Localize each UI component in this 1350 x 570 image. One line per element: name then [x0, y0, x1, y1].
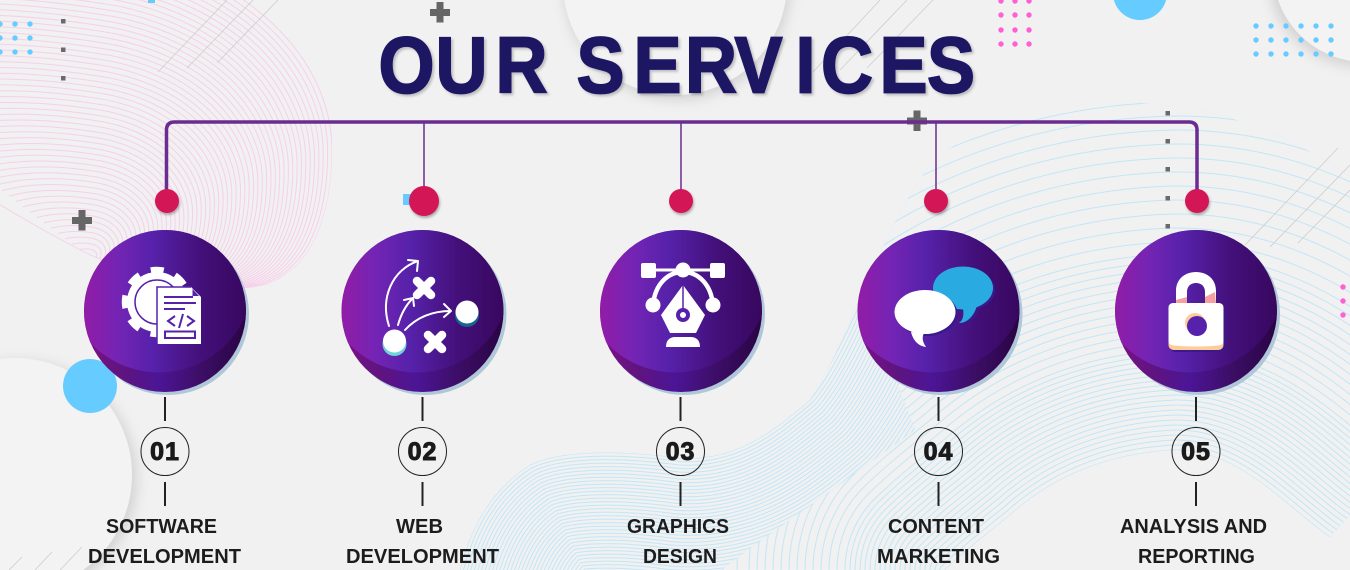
- label: web development: WEB: [396, 516, 443, 538]
- soft circle top centre: [563, 0, 789, 99]
- service 4: content marketing: [838, 184, 1027, 568]
- connector ticks 5: [1195, 397, 1197, 506]
- service 2: web development: [322, 184, 511, 568]
- blue dot grid right: [1253, 23, 1334, 57]
- connector ticks 4: [938, 397, 940, 506]
- grey squares: [61, 19, 1170, 228]
- label: analysis and reporting: ANALYSIS AND: [1120, 516, 1267, 538]
- icon: pen tool: [641, 262, 725, 347]
- label: graphics design: DESIGN: [643, 546, 717, 568]
- connector lines: [166, 122, 1197, 192]
- connector ticks 3: [680, 397, 682, 506]
- label: graphics design: GRAPHICS: [627, 516, 729, 538]
- grey plus signs: [72, 2, 927, 230]
- label: software development: DEVELOPMENT: [88, 546, 241, 568]
- number 04: 04: [924, 438, 953, 466]
- label: graphics design: [627, 516, 729, 568]
- icon: gear and code document: [126, 271, 201, 344]
- service 3: graphics design: [581, 184, 769, 568]
- label: web development: DEVELOPMENT: [346, 546, 499, 568]
- icon: speech bubbles: [894, 266, 995, 347]
- soft circle top right: [1269, 0, 1350, 66]
- label: software development: SOFTWARE: [106, 516, 217, 538]
- pink dots right: [1340, 284, 1346, 318]
- number 02: 02: [408, 438, 437, 466]
- icon: play strategy: [382, 260, 479, 356]
- disc 5: [1096, 184, 1284, 395]
- icon: padlock: [1168, 272, 1225, 352]
- number 01: 01: [150, 438, 180, 466]
- pink dot grid top: [998, 0, 1032, 47]
- label: software development: [88, 516, 241, 568]
- connector ticks 2: [422, 397, 424, 506]
- number 01: [141, 428, 189, 476]
- number 04: [914, 428, 962, 476]
- label: analysis and reporting: REPORTING: [1138, 546, 1255, 568]
- service 5: analysis and reporting: [1096, 184, 1284, 568]
- service 1: software development: [65, 184, 253, 568]
- connector dots: [155, 186, 1209, 216]
- label: content marketing: MARKETING: [877, 546, 1000, 568]
- number 05: 05: [1181, 438, 1211, 466]
- label: web development: [346, 516, 499, 568]
- number 03: 03: [666, 438, 695, 466]
- label: content marketing: [877, 516, 1000, 568]
- blue circles: [63, 0, 1167, 413]
- number 05: [1172, 428, 1220, 476]
- pink line wave: [0, 0, 332, 289]
- label: analysis and reporting: [1120, 516, 1267, 568]
- number 03: [656, 428, 704, 476]
- connector ticks 1: [164, 397, 166, 506]
- disc 4: [838, 184, 1027, 395]
- title: OUR SERVICES: [379, 21, 975, 110]
- label: content marketing: CONTENT: [888, 516, 984, 538]
- soft circle bottom left: [0, 358, 136, 570]
- number 02: [398, 428, 446, 476]
- blue line wave: [440, 220, 1350, 570]
- disc 3: [581, 184, 769, 395]
- disc 1: [65, 184, 253, 395]
- blue dot grid left: [0, 21, 33, 55]
- disc 2: [322, 184, 511, 395]
